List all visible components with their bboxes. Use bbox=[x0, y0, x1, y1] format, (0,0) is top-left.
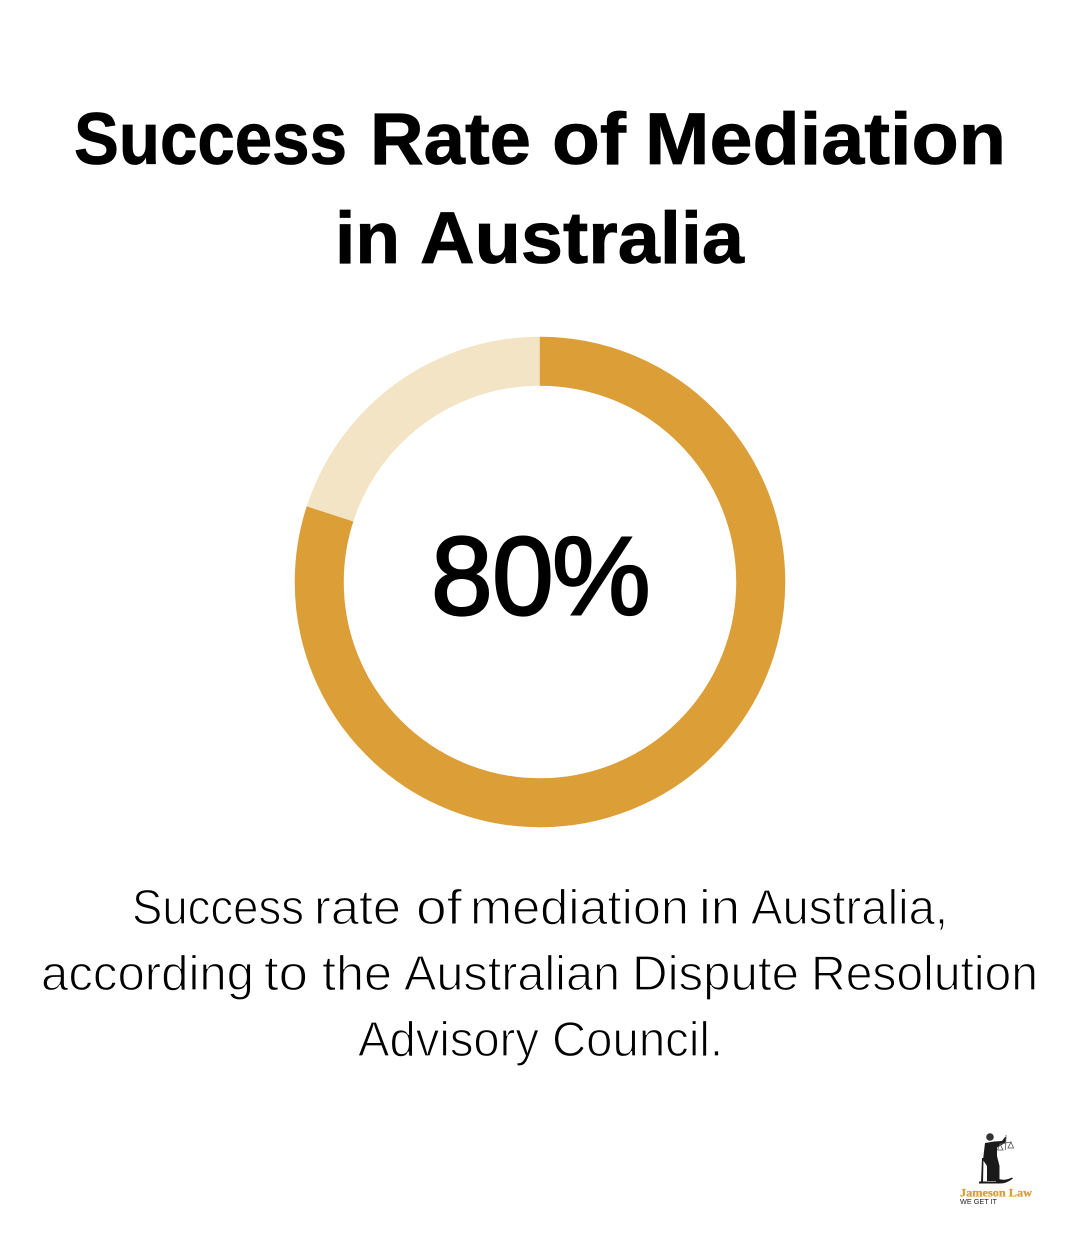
description: Advisory bbox=[358, 1013, 539, 1067]
description: to bbox=[264, 947, 308, 1001]
description: Australian bbox=[404, 947, 620, 1001]
description: Dispute bbox=[632, 947, 799, 1001]
description: Success bbox=[132, 881, 304, 935]
description: mediation bbox=[470, 881, 689, 935]
logo: Jameson Law bbox=[960, 1133, 1033, 1206]
percentage value: 80% bbox=[431, 514, 651, 638]
description: according bbox=[41, 947, 254, 1001]
description: rate bbox=[314, 881, 401, 935]
logo tagline: WE GET IT bbox=[960, 1199, 998, 1206]
description: Resolution bbox=[811, 947, 1038, 1001]
donut chart: 80% bbox=[319, 361, 761, 803]
logo name: Jameson Law bbox=[960, 1188, 1033, 1200]
title bbox=[74, 99, 1006, 279]
title: Australia bbox=[420, 198, 745, 279]
description: the bbox=[322, 947, 392, 1001]
description: of bbox=[416, 881, 462, 935]
description: Australia, bbox=[751, 881, 948, 935]
icon: lady justice bbox=[979, 1133, 1014, 1184]
title: Rate bbox=[370, 99, 531, 180]
description: in bbox=[699, 881, 740, 935]
title: Mediation bbox=[645, 99, 1006, 180]
description: Council. bbox=[552, 1013, 723, 1067]
title: Success bbox=[74, 99, 347, 180]
title: in bbox=[335, 198, 400, 279]
description bbox=[41, 881, 1038, 1067]
title: of bbox=[552, 99, 627, 180]
